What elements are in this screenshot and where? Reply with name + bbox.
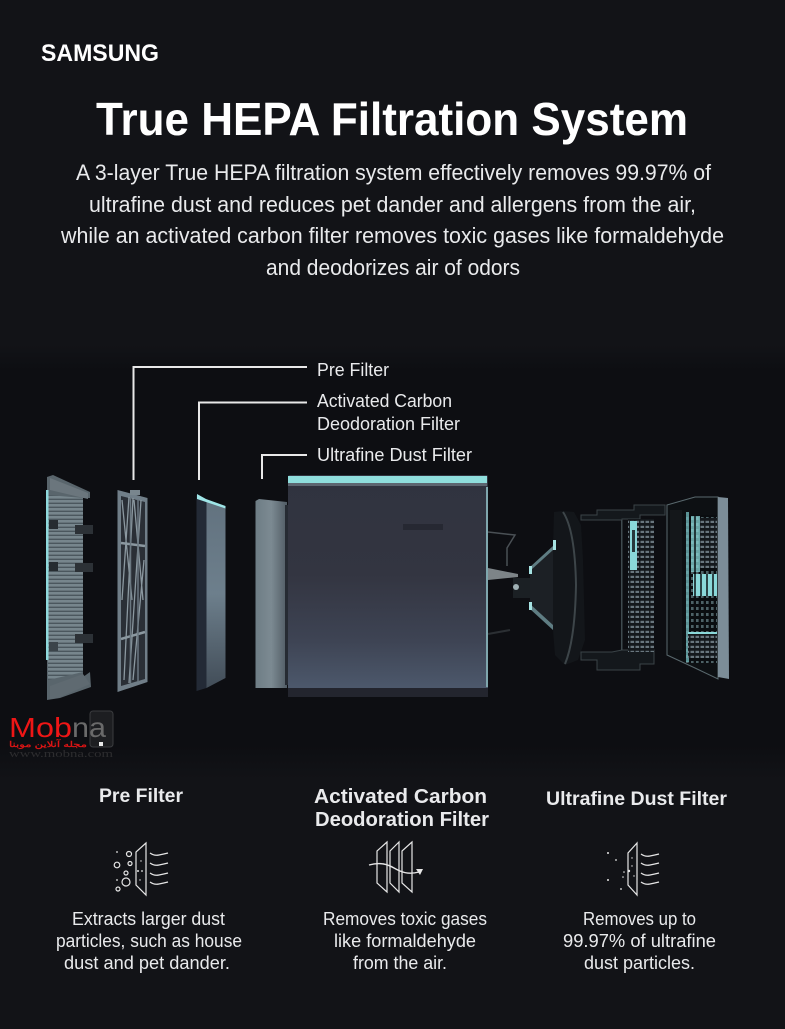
description: pre filter: Extracts larger dust [72,908,225,929]
description: ultrafine dust filter: Removes up to [583,908,696,929]
heading: activated carbon deodoration filter: Activated Carbon [314,786,487,808]
purifier main body [288,475,488,697]
description: activated carbon filter [323,908,487,973]
description: ultrafine dust filter: 99.97% of ultrafine [563,930,716,951]
callout labels [317,360,472,465]
rear part: inner cage [581,505,665,670]
description: activated carbon filter: like formaldehyde [334,930,476,951]
leader line: ultrafine dust filter [262,455,307,479]
heading: activated carbon deodoration filter: Deodoration Filter [315,809,489,831]
callout labels: Activated Carbon [317,391,452,411]
intro paragraph: A 3-layer True HEPA filtration system effectively removes 99.97% of [76,160,712,185]
leader line: activated carbon filter [199,402,307,480]
intro paragraph: ultrafine dust and reduces pet dander and allergens from the air, [89,192,696,217]
description: activated carbon filter: from the air. [353,952,447,973]
icon: pre filter [114,843,168,895]
icon: ultrafine dust filter [607,843,659,895]
exploded part: activated carbon filter [196,494,226,691]
exploded part: outer grille panel [46,475,93,700]
exploded part: pre filter mesh [118,490,148,692]
watermark: Mobna: Mob [9,712,72,743]
watermark: Mobna [9,711,113,760]
title: True HEPA Filtration System [96,93,688,145]
rear part: fan blades and motor [488,511,585,665]
description: ultrafine dust filter: dust particles. [584,952,695,973]
watermark: Mobna: مجله آنلاین موبنا [9,738,87,750]
heading: pre filter: Pre Filter [99,786,184,807]
heading: ultrafine dust filter: Ultrafine Dust Filter [546,789,728,810]
description: activated carbon filter: Removes toxic gases [323,908,487,929]
watermark: Mobna: www.mobna.com [9,749,113,760]
leader line: pre filter [134,367,307,480]
callout labels: Deodoration Filter [317,414,460,434]
description: pre filter [56,908,242,973]
intro paragraph: and deodorizes air of odors [266,255,520,280]
icon: activated carbon filter [369,842,423,892]
description: pre filter: particles, such as house [56,930,242,951]
intro paragraph [60,160,724,280]
exploded part: ultrafine dust filter [256,499,290,688]
logo: Samsung: SAMSUNG [41,40,159,67]
heading: activated carbon deodoration filter [314,786,489,831]
description: pre filter: dust and pet dander. [64,952,230,973]
watermark: Mobna: na [72,712,106,743]
callout labels: Pre Filter [317,360,389,380]
callout labels: Ultrafine Dust Filter [317,445,472,465]
description: ultrafine dust filter [563,908,716,973]
rear part: back housing [667,497,729,679]
intro paragraph: while an activated carbon filter removes toxic gases like formaldehyde [60,223,724,248]
